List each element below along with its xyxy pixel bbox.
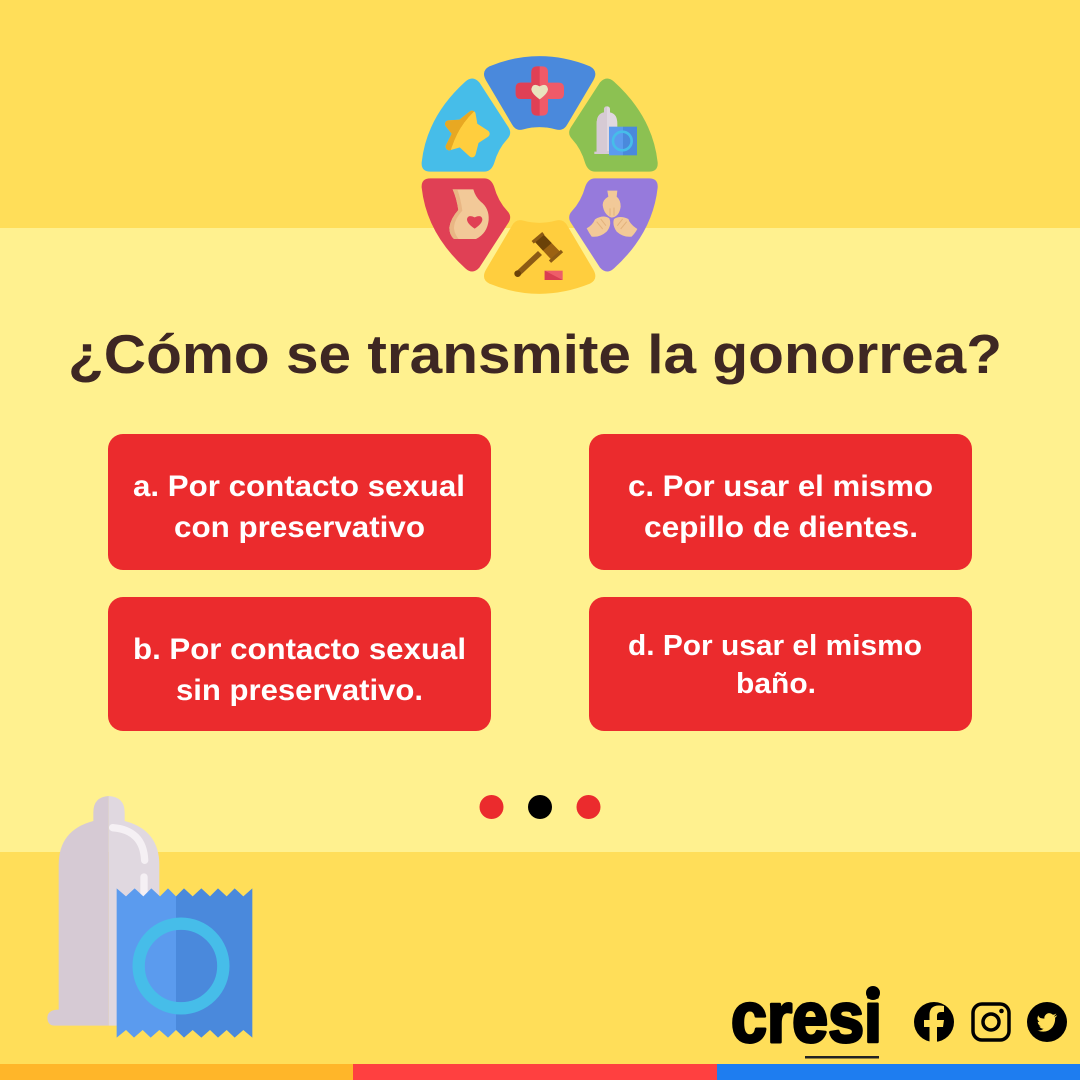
panel: option c: c. Por usar el mismo <box>628 470 933 503</box>
icon: hands segment <box>569 178 658 272</box>
panel: option c <box>589 434 972 570</box>
icon: facebook <box>914 1002 954 1042</box>
panel: option b: sin preservativo. <box>176 674 423 707</box>
panel: option a <box>108 434 491 570</box>
panel: option b <box>108 597 491 731</box>
icon: star segment <box>422 78 510 172</box>
icon: instagram <box>973 1004 1009 1040</box>
logo: cresi: cresi <box>731 979 882 1058</box>
icon: medical cross segment <box>484 56 595 130</box>
icon: condom and wrapper <box>47 796 252 1038</box>
panel: option c: cepillo de dientes. <box>644 511 918 544</box>
panel: option b: b. Por contacto sexual <box>133 633 466 666</box>
icon: wheel of six health topics <box>422 56 658 294</box>
icon: condom segment <box>569 78 658 172</box>
panel: option a: a. Por contacto sexual <box>133 470 465 503</box>
pagination dots <box>480 795 600 819</box>
panel: option a: con preservativo <box>174 511 425 544</box>
icon: pregnancy segment <box>422 178 510 272</box>
panel: option d: d. Por usar el mismo <box>628 630 922 662</box>
icon: gavel segment <box>484 220 595 294</box>
icon: twitter <box>1027 1002 1067 1042</box>
footer colour bar <box>0 1064 1080 1080</box>
panel: option d <box>589 597 972 731</box>
panel: option d: baño. <box>736 668 816 700</box>
title: ¿Cómo se transmite la gonorrea? <box>68 323 1002 385</box>
